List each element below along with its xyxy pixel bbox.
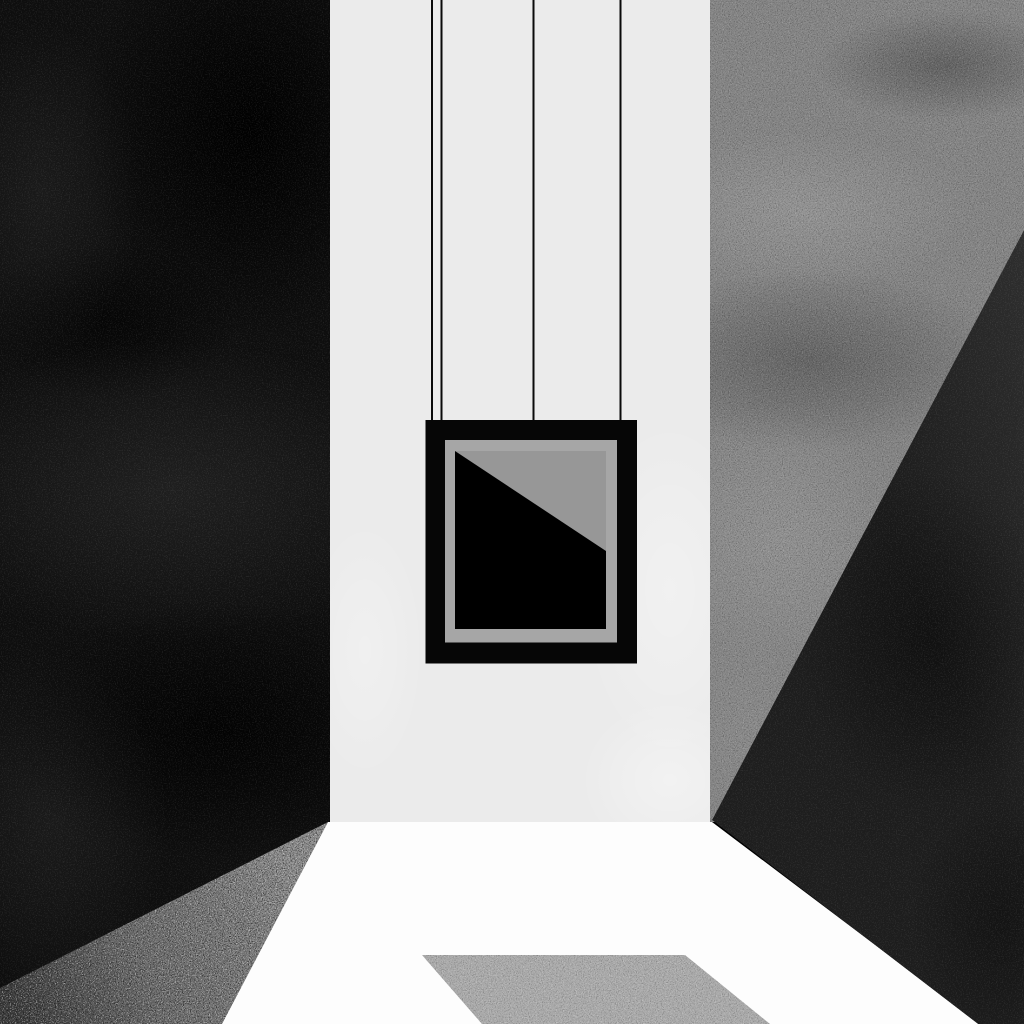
panel: left floor shadow [0,820,330,1024]
hanging wires [432,0,620,421]
frame grey mat [445,440,617,642]
hanging frame [426,420,637,664]
panel: floor [222,822,980,1024]
panel: left dark wall [0,0,330,988]
panel: right grey wall [710,0,1024,822]
panel: center white wall [330,0,710,822]
frame black triangle artwork [455,451,606,629]
frame grey triangle artwork [455,451,606,551]
frame outer black [426,420,637,664]
panel: floor grey rug [420,953,772,1024]
panel: right diagonal dark shadow [700,230,1024,1024]
